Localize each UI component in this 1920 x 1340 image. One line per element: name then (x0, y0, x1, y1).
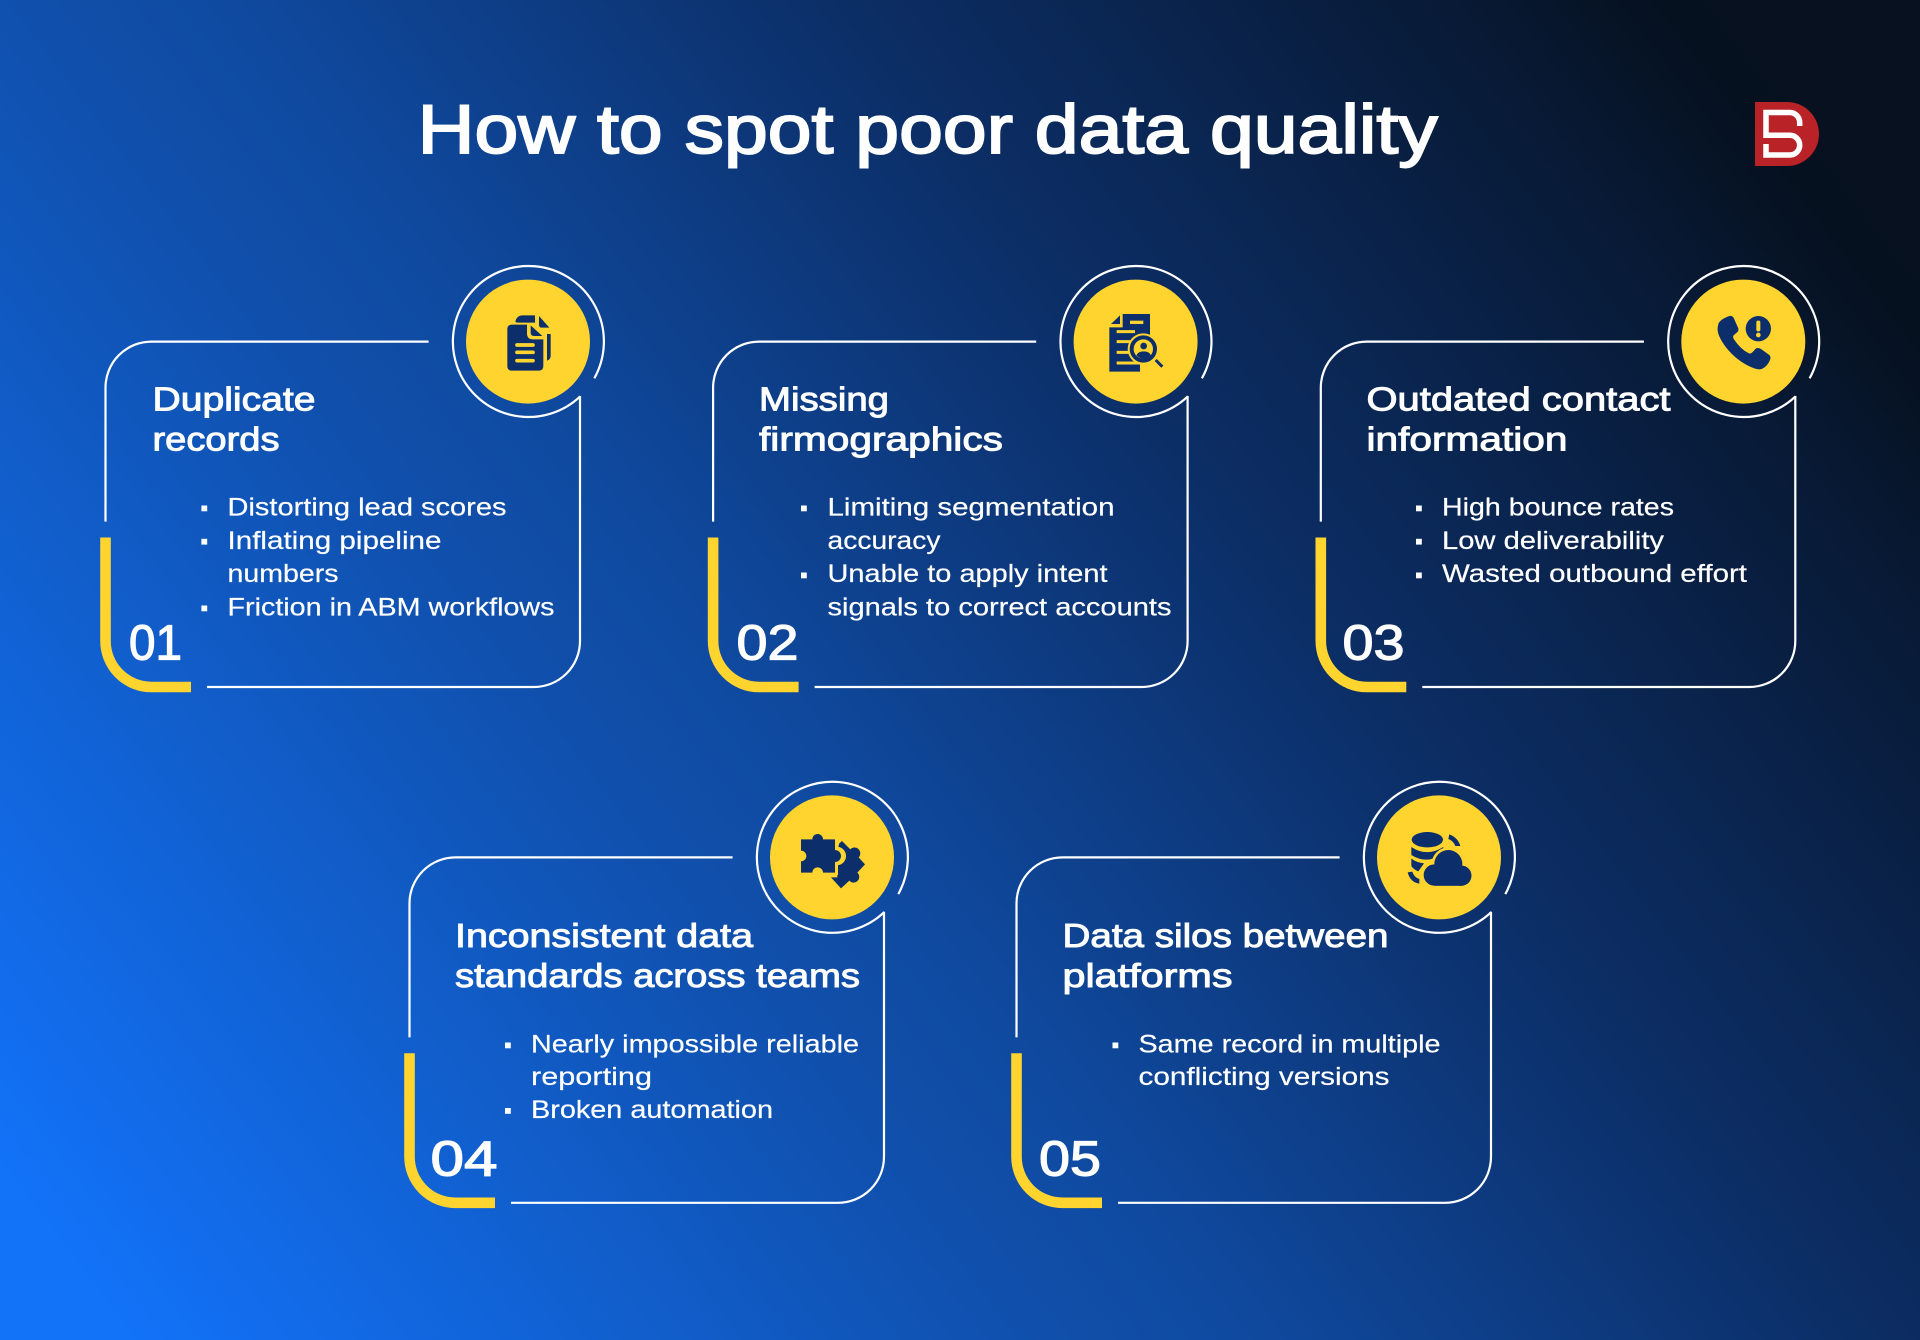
bullet list: Wasted outbound effort (1442, 560, 1747, 588)
bullet list (201, 494, 554, 622)
bullet list: Nearly impossible reliable (531, 1031, 859, 1059)
icon: database and cloud (1408, 832, 1471, 889)
bullet list: Same record in multiple (1138, 1031, 1440, 1059)
heading: information (1366, 422, 1568, 459)
bullet list: Broken automation (531, 1096, 773, 1124)
number 04: 04 (430, 1132, 498, 1186)
heading: platforms (1062, 958, 1232, 995)
card frame 03 (1321, 266, 1819, 687)
bullet list (1112, 1031, 1440, 1091)
bullet list: accuracy (828, 527, 941, 555)
bullet list: Unable to apply intent (828, 560, 1108, 588)
bullet list (801, 494, 1172, 622)
bullet list: High bounce rates (1442, 494, 1674, 522)
icon: document with person magnifier (1109, 314, 1162, 372)
number 05: 05 (1039, 1132, 1101, 1186)
heading (455, 918, 860, 995)
bullet list: Distorting lead scores (228, 494, 506, 522)
heading: records (152, 422, 280, 459)
icon: phone with alert (1718, 316, 1771, 369)
heading (1062, 918, 1388, 995)
bullet list (1416, 494, 1747, 588)
card frame 01 (106, 266, 604, 687)
bullet list: numbers (228, 560, 338, 588)
bullet list: Limiting segmentation (828, 494, 1114, 522)
heading: firmographics (759, 422, 1003, 459)
bullet list: conflicting versions (1138, 1063, 1390, 1091)
card frame 02 (713, 266, 1211, 687)
panel: Outdated contact information (1321, 266, 1819, 687)
panel: Duplicate records (106, 266, 604, 687)
number 03: 03 (1342, 616, 1404, 670)
bullet list: Friction in ABM workflows (228, 594, 554, 622)
heading (152, 382, 316, 459)
bullet list: Low deliverability (1442, 527, 1665, 555)
bullet list (505, 1031, 859, 1124)
heading: Outdated contact (1366, 382, 1671, 419)
title: How to spot poor data quality (418, 91, 1438, 168)
number 02: 02 (736, 616, 798, 670)
heading: Inconsistent data (455, 918, 753, 955)
logo (1755, 102, 1819, 166)
bullet list: signals to correct accounts (828, 594, 1172, 622)
bullet list: Inflating pipeline (228, 527, 442, 555)
card frame 05 (1016, 782, 1515, 1203)
panel: Missing firmographics (713, 266, 1211, 687)
heading: Data silos between (1062, 918, 1388, 955)
number 01: 01 (129, 616, 182, 670)
heading: Duplicate (152, 382, 316, 419)
panel: Inconsistent data standards across teams (410, 782, 908, 1203)
card frame 04 (410, 782, 908, 1203)
icon: documents (507, 315, 551, 371)
heading (759, 382, 1003, 459)
heading: Missing (759, 382, 889, 419)
panel: Data silos between platforms (1016, 782, 1515, 1203)
bullet list: reporting (531, 1063, 652, 1091)
icon: puzzle and gear (801, 834, 865, 888)
heading: standards across teams (455, 958, 860, 995)
heading (1366, 382, 1671, 459)
